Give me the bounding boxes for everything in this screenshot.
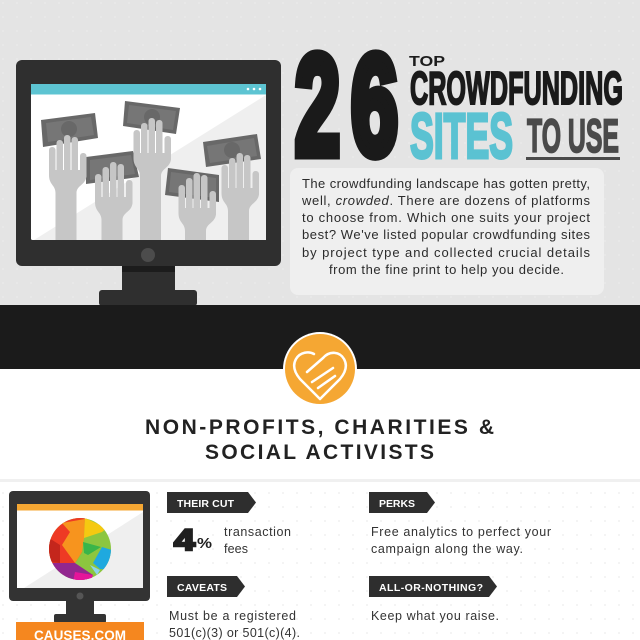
title xyxy=(295,26,623,185)
section heading: SOCIAL ACTIVISTS xyxy=(205,441,434,464)
title: 2 xyxy=(295,26,340,185)
perks text: campaign along the way. xyxy=(371,542,523,556)
intro text block: by project type and collected crucial details xyxy=(302,245,590,260)
caveats text: Must be a registered xyxy=(169,609,296,623)
icon: colourful polygon globe xyxy=(49,518,112,582)
lower background xyxy=(0,369,640,640)
perks tag xyxy=(369,492,435,513)
all-or-nothing tag: ALL-OR-NOTHING? xyxy=(379,582,483,594)
title: SITES xyxy=(410,100,513,172)
their cut tag: THEIR CUT xyxy=(177,498,235,510)
stat: 4% transaction fees xyxy=(174,524,291,557)
all-or-nothing tag xyxy=(369,576,497,597)
intro text block: well, crowded. There are dozens of platforms xyxy=(301,193,590,208)
section heading: NON-PROFITS, CHARITIES & xyxy=(145,416,494,439)
icon: orange heart badge xyxy=(283,332,357,406)
title: TOP xyxy=(409,53,445,70)
caveats tag: CAVEATS xyxy=(177,582,227,594)
caveats tag xyxy=(167,576,245,597)
intro text block xyxy=(290,168,604,295)
section heading xyxy=(145,416,494,464)
intro text block: best? We've listed popular crowdfunding sites xyxy=(302,227,590,242)
their cut tag xyxy=(167,492,256,513)
stat: 4% transaction fees: 4 xyxy=(174,524,195,557)
intro text block: The crowdfunding landscape has gotten pretty, xyxy=(302,176,590,191)
perks text xyxy=(371,525,551,556)
small monitor: causes.com xyxy=(9,491,150,623)
monitor illustration: hands holding money xyxy=(16,60,281,306)
intro text block: from the fine print to help you decide. xyxy=(329,262,564,277)
all-or-nothing text: Keep what you raise. xyxy=(371,609,499,623)
intro text block: to choose from. Which one suits your project xyxy=(302,210,590,225)
perks text: Free analytics to perfect your xyxy=(371,525,551,539)
stat: 4% transaction fees: transaction xyxy=(224,525,291,539)
header background xyxy=(0,0,640,306)
title: 6 xyxy=(351,26,398,185)
stat: 4% transaction fees: fees xyxy=(224,542,248,556)
site name label xyxy=(16,622,144,640)
perks tag: PERKS xyxy=(379,498,415,510)
stat: 4% transaction fees: % xyxy=(197,535,212,552)
caveats text: 501(c)(3) or 501(c)(4). xyxy=(169,626,300,640)
money bills xyxy=(41,101,261,202)
caveats text xyxy=(169,609,300,640)
black band xyxy=(0,305,640,369)
raised hands xyxy=(49,118,259,240)
